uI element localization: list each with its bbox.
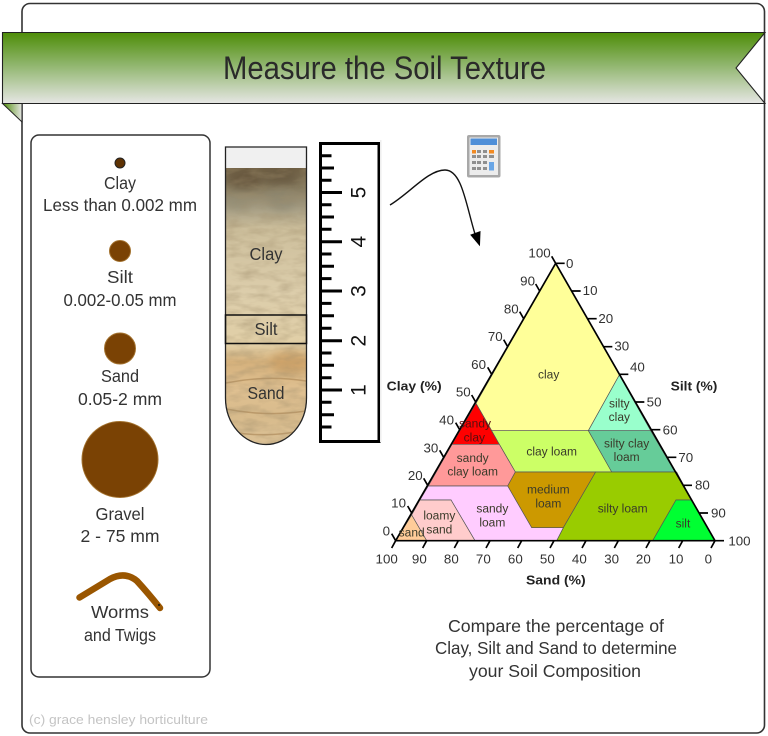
- region labels: loamy: [423, 509, 455, 523]
- sand label: 0.05-2 mm: [78, 389, 162, 409]
- icon: worm: [80, 575, 160, 608]
- sand axis numbers: 70: [476, 551, 491, 566]
- sand axis numbers: 100: [376, 551, 398, 566]
- tube outline: [226, 147, 306, 444]
- clay label: Less than 0.002 mm: [43, 195, 197, 215]
- panel frame: [31, 135, 210, 677]
- clay label: Clay: [104, 173, 136, 193]
- ruler numbers: 2: [348, 335, 370, 347]
- clay axis numbers: 40: [439, 412, 454, 427]
- sand axis numbers: 20: [636, 551, 651, 566]
- arrow: to soil triangle: [390, 170, 480, 245]
- silt label: 0.002-0.05 mm: [64, 290, 176, 310]
- region: sand: [396, 515, 427, 541]
- sand axis numbers: 60: [508, 551, 523, 566]
- ruler ticks: [320, 156, 342, 427]
- region: sandy clay loam: [428, 444, 515, 486]
- gravel label: [80, 504, 160, 546]
- silt axis numbers: 40: [630, 360, 645, 375]
- region labels: sand: [399, 526, 425, 540]
- caption: Clay, Silt and Sand to determine: [435, 638, 677, 658]
- icon: gravel particle: [82, 422, 158, 498]
- region labels: loam: [535, 496, 561, 510]
- region labels: clay: [538, 368, 559, 382]
- silt axis numbers: 80: [695, 478, 710, 493]
- icon: silt particle: [110, 240, 130, 262]
- ruler numbers: [348, 187, 370, 396]
- region labels: sandy: [459, 416, 491, 430]
- clay axis numbers: 80: [504, 301, 519, 316]
- clay axis numbers: 70: [488, 329, 503, 344]
- worms label: Worms: [91, 602, 149, 622]
- clay axis numbers: 0: [383, 524, 390, 539]
- region labels: medium: [527, 482, 570, 496]
- region: clay loam: [492, 431, 612, 472]
- silt label: [64, 267, 176, 310]
- clay axis numbers: 100: [528, 245, 551, 260]
- sand label: Sand: [101, 366, 139, 386]
- silt label: Silt: [107, 267, 133, 287]
- region labels: sandy: [476, 502, 508, 516]
- silt axis numbers: 100: [728, 533, 751, 548]
- silt axis numbers: 90: [711, 505, 726, 520]
- sand axis numbers: 10: [669, 551, 683, 566]
- panel: particle sizes: [31, 135, 210, 677]
- clay axis title: Clay (%): [387, 379, 442, 394]
- silt layer label: Silt: [254, 319, 278, 339]
- region: loamy sand: [412, 500, 475, 541]
- silt axis numbers: 70: [678, 450, 693, 465]
- clay axis numbers: 10: [391, 496, 406, 511]
- region: silty clay loam: [588, 431, 675, 472]
- soil test tube: [225, 147, 310, 445]
- region labels: clay loam: [447, 465, 498, 479]
- region labels: sand: [426, 522, 452, 536]
- ruler numbers: 3: [348, 285, 370, 297]
- tube empty top: [226, 147, 306, 168]
- icon: calculator: [467, 135, 500, 178]
- region labels: loam: [479, 515, 505, 529]
- gravel label: 2 - 75 mm: [80, 526, 160, 546]
- region: silty loam: [557, 472, 692, 541]
- region labels: silt: [676, 517, 691, 531]
- silt axis numbers: 60: [663, 422, 677, 437]
- region labels: silty: [609, 396, 630, 410]
- ruler: [320, 144, 379, 442]
- region: clay: [476, 263, 619, 431]
- title: Measure the Soil Texture: [223, 50, 546, 86]
- worms label: [84, 602, 156, 645]
- sand axis title: Sand (%): [526, 572, 586, 587]
- silt axis numbers: 50: [647, 395, 661, 410]
- ruler numbers: 1: [348, 384, 370, 396]
- region labels: silty clay: [604, 436, 649, 450]
- region labels: [399, 368, 691, 540]
- region labels: sandy: [457, 451, 489, 465]
- gravel label: Gravel: [96, 504, 144, 524]
- region: medium loam: [508, 472, 596, 528]
- clay axis numbers: 50: [456, 385, 471, 400]
- caption: [435, 616, 677, 681]
- icon: sand particle: [104, 333, 136, 364]
- region labels: clay loam: [526, 444, 577, 458]
- sand axis numbers: 80: [444, 551, 459, 566]
- copyright note: (c) grace hensley horticulture: [29, 712, 208, 727]
- chart: soil texture triangle: [376, 245, 751, 587]
- region labels: silty loam: [598, 502, 648, 516]
- ruler numbers: 4: [348, 236, 370, 248]
- ruler numbers: 5: [348, 187, 370, 198]
- sand axis numbers: [376, 551, 712, 566]
- clay label: [43, 173, 197, 215]
- clay axis numbers: 20: [408, 468, 423, 483]
- clay axis numbers: 30: [424, 440, 438, 455]
- region labels: loam: [614, 450, 640, 464]
- sand axis numbers: 0: [705, 551, 712, 566]
- clay layer label: Clay: [250, 244, 283, 264]
- ribbon body: [2, 32, 765, 104]
- ruler body: [320, 144, 379, 442]
- triangle outline and ticks: [392, 256, 724, 548]
- region: silty clay: [588, 375, 651, 431]
- caption: Compare the percentage of: [448, 616, 664, 636]
- icon: clay particle: [115, 158, 125, 168]
- soil sample: [225, 168, 310, 445]
- faint image edge line: [380, 140, 382, 442]
- region labels: clay: [609, 410, 630, 424]
- clay axis numbers: 60: [471, 357, 486, 372]
- banner title ribbon: [2, 32, 765, 122]
- sand axis numbers: 30: [604, 551, 619, 566]
- worms label: and Twigs: [84, 625, 156, 645]
- silt axis numbers: 0: [566, 256, 573, 271]
- sand axis numbers: 50: [540, 551, 555, 566]
- region: silt: [653, 500, 715, 541]
- silt axis title: Silt (%): [671, 379, 717, 394]
- sand axis numbers: 40: [572, 551, 587, 566]
- clay axis numbers: 90: [520, 274, 535, 289]
- region labels: clay: [464, 430, 485, 444]
- silt axis numbers: 20: [598, 311, 613, 326]
- ribbon fold: [2, 104, 22, 122]
- silt axis numbers: [566, 256, 751, 548]
- sand label: [78, 366, 162, 409]
- silt axis numbers: 10: [583, 283, 597, 298]
- sand layer label: Sand: [248, 383, 284, 403]
- sand axis numbers: 90: [412, 551, 427, 566]
- clay axis numbers: [383, 245, 551, 539]
- region: sandy clay: [452, 403, 499, 444]
- caption: your Soil Composition: [469, 661, 641, 681]
- region: sandy loam: [420, 486, 563, 541]
- silt axis numbers: 30: [614, 339, 629, 354]
- silt layer box: [226, 315, 306, 344]
